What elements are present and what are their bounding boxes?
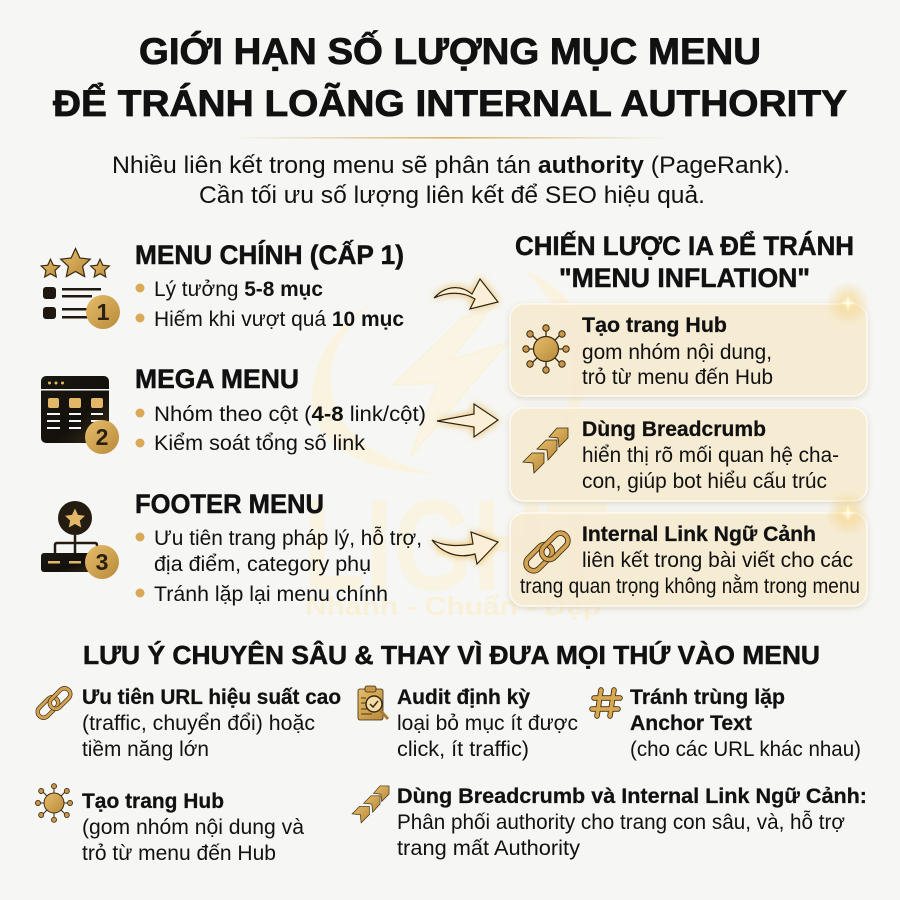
note text: audit: loại bỏ mục ít được (397, 712, 578, 735)
card text: internal link: Internal Link Ngữ Cảnh (582, 523, 816, 546)
card: tạo trang hub (510, 304, 867, 396)
note: audit (358, 686, 578, 761)
bullets: footer menu: Ưu tiên trang pháp lý, hỗ trợ, (154, 527, 422, 550)
note text: anchor: (cho các URL khác nhau) (630, 738, 861, 761)
heading: footer menu: FOOTER MENU (135, 489, 324, 519)
icon: chevrons small (352, 786, 389, 823)
heading: strategy: "MENU INFLATION" (559, 263, 810, 293)
title (53, 30, 847, 124)
watermark logo: Nhanh - Chuẩn - Đẹp (305, 591, 601, 621)
icon: hash (592, 690, 620, 716)
note text: hub (82, 790, 304, 865)
note text: breadcrumb: trang mất Authority (397, 837, 581, 860)
note: anchor text (592, 686, 861, 761)
arrow: mega menu to breadcrumb (437, 404, 498, 437)
card text: breadcrumb: Dùng Breadcrumb (582, 418, 766, 441)
subtitle: Nhiều liên kết trong menu sẽ phân tán authority (PageRank). (112, 152, 790, 179)
icon: chevrons (523, 428, 568, 473)
watermark logo (303, 270, 608, 621)
note text: url: Ưu tiên URL hiệu suất cao (82, 686, 341, 709)
card text: hub: Tạo trang Hub (582, 314, 727, 337)
heading: strategy (515, 230, 854, 293)
heading: strategy: CHIẾN LƯỢC IA ĐỂ TRÁNH (515, 230, 854, 261)
note text: anchor: Tránh trùng lặp (630, 686, 785, 709)
bullets: mega menu: Kiểm soát tổng số link (154, 432, 366, 455)
note text: breadcrumb: Phân phối authority cho trang con sâu, và, hỗ trợ (397, 811, 845, 834)
note text: hub: Tạo trang Hub (82, 790, 224, 813)
card text: hub: gom nhóm nội dung, (582, 341, 772, 364)
sparkle: card 3 (826, 491, 870, 535)
title: ĐỂ TRÁNH LOÃNG INTERNAL AUTHORITY (53, 82, 847, 124)
heading: notes: LƯU Ý CHUYÊN SÂU & THAY VÌ ĐƯA MỌI THỨ VÀO MENU (83, 640, 820, 670)
bullets: footer menu: Tránh lặp lại menu chính (154, 583, 388, 606)
subtitle (112, 152, 790, 209)
subtitle: Cần tối ưu số lượng liên kết để SEO hiệu quả. (199, 182, 705, 209)
icon: sitemap badge 3 (41, 501, 119, 579)
heading: menu chính: MENU CHÍNH (CẤP 1) (135, 239, 404, 270)
note text: anchor (630, 686, 861, 761)
icon: chain link (523, 528, 571, 576)
note text: anchor: Anchor Text (630, 712, 752, 735)
card text: hub: trỏ từ menu đến Hub (582, 366, 773, 389)
icon: hub small (35, 784, 73, 822)
card text: internal link: liên kết trong bài viết cho các (582, 549, 853, 572)
heading: mega menu: MEGA MENU (135, 364, 299, 394)
bullets: menu chính (136, 278, 404, 331)
panel: mega menu (41, 364, 426, 455)
note text: audit: Audit định kỳ (397, 686, 530, 709)
icon: link small (35, 684, 73, 722)
card text: breadcrumb: hiển thị rõ mối quan hệ cha- (582, 444, 839, 467)
note text: url: tiềm năng lớn (82, 738, 209, 761)
note text: breadcrumb: Dùng Breadcrumb và Internal Link Ngữ Cảnh: (397, 785, 867, 808)
icon: window badge 2 (41, 376, 119, 454)
icon: clipboard magnifier (358, 686, 388, 720)
note text: hub: trỏ từ menu đến Hub (82, 842, 276, 865)
note text: audit (397, 686, 578, 761)
card: internal link (510, 513, 867, 606)
bullets: menu chính: Hiếm khi vượt quá 10 mục (154, 308, 404, 331)
card text: breadcrumb (582, 418, 839, 493)
panel: menu chính (41, 239, 404, 331)
arrow: menu chính to hub (434, 279, 498, 309)
panel: footer menu (41, 489, 422, 606)
arrow: footer to internal link (432, 532, 498, 564)
bullets: footer menu (136, 527, 422, 606)
card text: breadcrumb: con, giúp bot hiểu cấu trúc (582, 470, 827, 493)
note: breadcrumb and internal link (352, 785, 867, 860)
icon: sitemap badge 3: 3 (96, 549, 108, 575)
card text: hub (582, 314, 773, 389)
icon: window badge 2: 2 (96, 424, 108, 450)
note text: audit: click, ít traffic) (397, 738, 529, 761)
icon: stars list badge 1 (41, 248, 120, 329)
bullets: menu chính: Lý tưởng 5-8 mục (154, 278, 323, 301)
card text: internal link: trang quan trọng không nằm trong menu (520, 575, 860, 598)
watermark logo: LIGHT (303, 472, 608, 618)
card: breadcrumb (510, 408, 867, 501)
note text: url: (traffic, chuyển đổi) hoặc (82, 712, 315, 735)
bullets: footer menu: địa điểm, category phụ (154, 553, 371, 576)
bullets: mega menu: Nhóm theo cột ( 4-8 link/cột) (154, 403, 426, 426)
note: ưu tiên url (35, 684, 341, 761)
icon: stars list badge 1: 1 (97, 299, 110, 325)
title: GIỚI HẠN SỐ LƯỢNG MỤC MENU (139, 30, 761, 72)
sparkle: card 1 (826, 281, 870, 325)
note text: url (82, 686, 341, 761)
note text: breadcrumb (397, 785, 867, 860)
icon: hub (523, 325, 569, 373)
card text: internal link (520, 523, 860, 598)
note: tạo trang hub (35, 784, 304, 865)
bullets: mega menu (136, 403, 426, 455)
note text: hub: (gom nhóm nội dung và (82, 816, 304, 839)
